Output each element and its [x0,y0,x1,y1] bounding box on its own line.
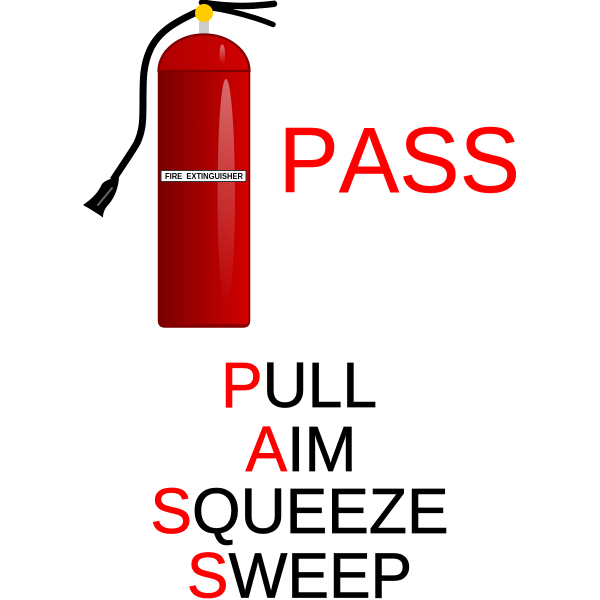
fire extinguisher illustration [83,2,274,327]
title: PASS: PASS [278,109,520,212]
valve stem [200,18,208,36]
valve cap [195,4,213,22]
body base shadow [160,324,248,326]
label plate [161,170,246,182]
line: Aim: AIM [246,414,356,485]
body highlight [218,79,235,308]
upper handle [202,2,274,6]
lower handle [206,7,273,24]
nozzle shine [98,188,112,205]
line: Squeeze: SQUEEZE [150,476,449,547]
extinguisher dome [158,34,250,71]
dome highlight [220,44,225,64]
extinguisher body [158,71,250,327]
hose [113,12,197,180]
nozzle [83,176,119,218]
word list [150,350,449,600]
label text: FIRE EXTINGUISHER [165,172,243,181]
line: Pull: PULL [221,350,377,421]
